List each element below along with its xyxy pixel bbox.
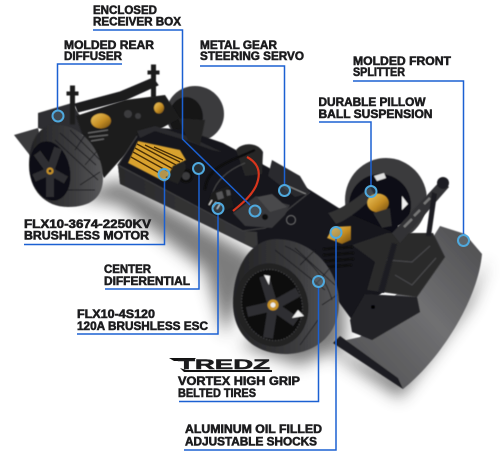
callout: enclosed receiver box: ENCLOSED — [93, 5, 157, 17]
callout: tredz vortex tires: BELTED TIRES — [178, 388, 256, 400]
callout: brushless motor — [24, 169, 170, 244]
molded front splitter — [333, 226, 482, 389]
callout: brushless motor: FLX10-3674-2250KV — [24, 219, 151, 231]
near front wheel — [226, 239, 339, 355]
callout: center differential — [104, 163, 204, 289]
callout: durable pillow ball suspension: DURABLE PILLOW — [318, 97, 426, 109]
callout: aluminum oil filled shocks: ADJUSTABLE SHOCKS — [185, 436, 317, 448]
callout: enclosed receiver box: RECEIVER BOX — [93, 16, 181, 28]
callout: molded front splitter — [353, 56, 469, 246]
near rear wheel — [24, 125, 103, 207]
rear suspension and shocks — [76, 95, 180, 178]
servo and plate — [233, 160, 310, 228]
callout: molded rear diffuser — [52, 40, 155, 122]
battery strap — [205, 144, 263, 195]
front near shock — [323, 226, 354, 267]
gold motor — [128, 141, 186, 182]
rear tower and posts — [67, 65, 159, 124]
callout: metal gear steering servo: METAL GEAR — [200, 40, 278, 52]
tredz logo — [169, 356, 272, 372]
callout: metal gear steering servo: STEERING SERVO — [200, 51, 304, 63]
callout: molded rear diffuser: MOLDED REAR — [64, 40, 155, 52]
chassis tub — [118, 118, 392, 320]
tredz logo: TREDZ — [178, 356, 271, 372]
callout: aluminum oil filled shocks: ALUMINUM OIL FILLED — [185, 424, 322, 436]
callout: center differential: CENTER — [104, 264, 152, 276]
callout: enclosed receiver box — [93, 5, 260, 216]
far front wheel — [345, 158, 427, 242]
callout: tredz vortex tires: VORTEX HIGH GRIP — [178, 376, 300, 388]
callout: tredz vortex tires — [169, 276, 324, 402]
callout: brushless esc: FLX10-4S120 — [77, 309, 155, 321]
esc — [207, 186, 234, 213]
callout: aluminum oil filled shocks — [184, 227, 342, 450]
callout: brushless motor: BRUSHLESS MOTOR — [24, 230, 150, 242]
callout: molded rear diffuser: DIFFUSER — [64, 51, 123, 63]
callout: durable pillow ball suspension: BALL SUSPENSION — [318, 109, 432, 121]
ground shadow — [70, 180, 488, 398]
callout: molded front splitter: SPLITTER — [353, 67, 406, 79]
callout: molded front splitter: MOLDED FRONT — [353, 56, 451, 68]
callout: center differential: DIFFERENTIAL — [104, 276, 190, 288]
front plate and bumper — [350, 233, 445, 340]
red wire — [233, 157, 259, 211]
callout: brushless esc — [77, 203, 224, 334]
callout: metal gear steering servo — [200, 40, 304, 196]
callout: durable pillow ball suspension — [318, 97, 432, 197]
center differential gears — [168, 159, 202, 184]
car chassis photo illustration — [14, 65, 488, 398]
callout: brushless esc: 120A BRUSHLESS ESC — [77, 321, 208, 333]
rear diffuser — [14, 103, 92, 158]
far rear wheel — [166, 86, 224, 142]
front gold shock far — [367, 194, 392, 228]
front towers and arms — [328, 177, 449, 293]
